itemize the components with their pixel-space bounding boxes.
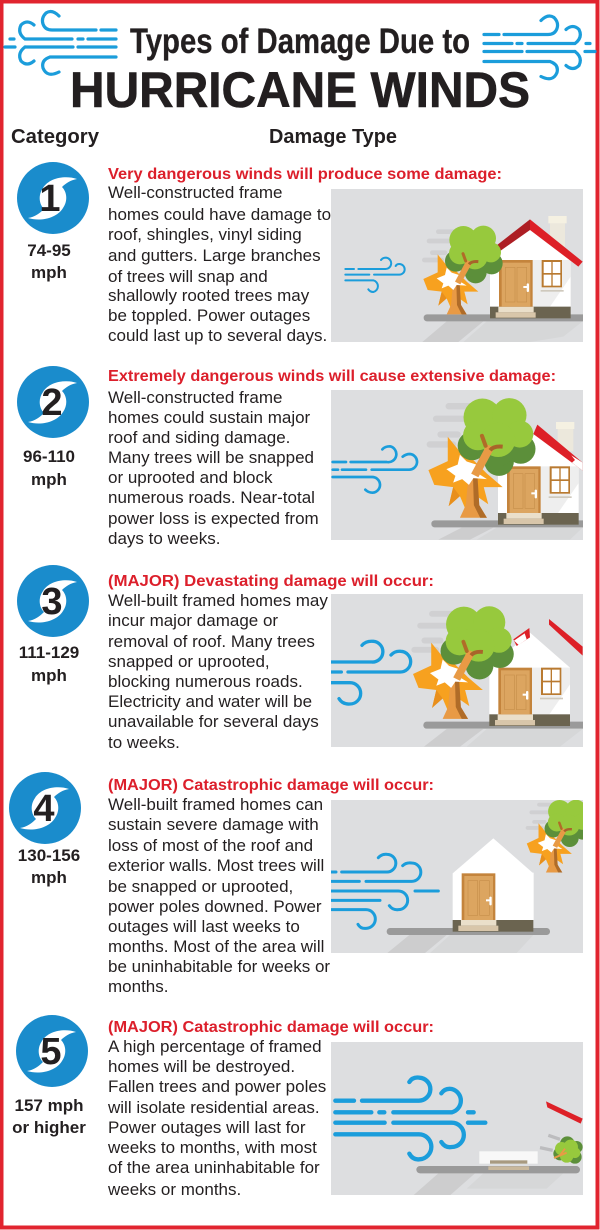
category 3 description: removal of roof. Many trees	[108, 632, 315, 651]
fallen tree	[428, 398, 536, 518]
category 1 badge: 74-95	[27, 241, 71, 260]
category 1 description: could last up to several days.	[108, 326, 327, 345]
column heading: category: Category	[11, 126, 100, 148]
category 4 badge: 4	[33, 788, 55, 830]
category 5 description: weeks to months, with most	[107, 1138, 317, 1157]
category 3 badge: 111-129	[19, 643, 79, 662]
category 4 description: months. Most of the area will	[108, 937, 324, 956]
category 5 description: Fallen trees and power poles	[108, 1077, 326, 1096]
wind gust	[333, 446, 417, 493]
category 3 description	[108, 573, 434, 752]
category 2 description: homes could sustain major	[108, 408, 311, 427]
title: Types of Damage Due to	[130, 22, 470, 61]
wind gust	[345, 258, 405, 292]
panel: category 2 illustration	[330, 385, 600, 545]
title	[70, 22, 530, 118]
category 4 description: be snapped or uprooted,	[108, 877, 293, 896]
category 5 badge: 5	[40, 1031, 62, 1073]
category 4 badge	[9, 772, 81, 887]
category 4 description: outages will last weeks to	[108, 917, 300, 936]
panel: category 4 illustration	[330, 795, 592, 955]
house	[489, 633, 570, 726]
panel: category 3 illustration	[330, 590, 597, 750]
category 2 description: Many trees will be snapped	[108, 448, 314, 467]
broken roof pieces	[513, 619, 583, 656]
category 1 badge: 1	[39, 178, 61, 220]
category 5 description: weeks or months.	[107, 1180, 241, 1199]
category 5 description: Power outages will last for	[108, 1118, 306, 1137]
category 2 description: power loss is expected from	[108, 509, 319, 528]
category 4 description: months.	[108, 977, 168, 996]
category 4 description: loss of most of the roof and	[108, 836, 313, 855]
category 1 description: homes could have damage to	[108, 205, 331, 224]
house	[498, 431, 579, 525]
wind gust	[331, 854, 438, 928]
category 3 description: Well-built framed homes may	[108, 591, 328, 610]
house	[490, 225, 571, 318]
category 4 description: (MAJOR) Catastrophic damage will occur:	[108, 777, 434, 794]
category 2 description: days to weeks.	[108, 529, 220, 548]
red roof	[497, 219, 583, 267]
category 3 description: blocking numerous roads.	[108, 672, 303, 691]
icon: right header wind gust	[484, 16, 595, 79]
destroyed house floor	[479, 1151, 538, 1170]
category 3 description: incur major damage or	[108, 611, 278, 630]
category 2 badge: 96-110	[23, 447, 75, 466]
category 3 badge	[17, 565, 89, 685]
category 2 description	[108, 368, 556, 548]
category 1 description: of trees will snap and	[108, 267, 268, 286]
wind gust	[331, 641, 411, 704]
category 3 description: snapped or uprooted,	[108, 652, 270, 671]
category 2 badge: 2	[41, 382, 63, 424]
category 5 description: (MAJOR) Catastrophic damage will occur:	[108, 1019, 434, 1036]
flying roof piece	[546, 1101, 583, 1124]
category 2 description: numerous roads. Near-total	[108, 488, 315, 507]
fallen tree	[413, 606, 514, 719]
column heading: damage type: Damage Type	[269, 126, 397, 148]
category 4 description: sustain severe damage with	[108, 815, 319, 834]
category 1 description: be toppled. Power outages	[108, 306, 310, 325]
category 5 badge: or higher	[12, 1118, 86, 1137]
small fallen tree	[540, 1135, 583, 1164]
category 2 description: roof and siding damage.	[108, 428, 290, 447]
category 1 description: roof, shingles, vinyl siding	[108, 225, 302, 244]
house without roof or window	[453, 838, 534, 932]
category 1 description	[108, 166, 502, 345]
panel: category 5 illustration	[330, 1035, 583, 1199]
category 5 description	[107, 1019, 434, 1199]
category 1 badge	[17, 162, 89, 282]
category 1 description: Well-constructed frame	[108, 183, 282, 202]
category 4 description	[108, 777, 434, 996]
category 5 description: homes will be destroyed.	[108, 1057, 295, 1076]
category 3 badge: 3	[41, 581, 63, 623]
icon: left header wind gust	[5, 12, 116, 74]
category 1 badge: mph	[31, 263, 67, 282]
wind gust	[335, 1078, 485, 1159]
chimney	[548, 216, 567, 247]
category 2 badge: mph	[31, 470, 67, 489]
category 4 badge: mph	[31, 868, 67, 887]
category 4 badge: 130-156	[18, 846, 80, 865]
category 1 description: Very dangerous winds will produce some damage:	[108, 166, 502, 183]
category 4 description: exterior walls. Most trees will	[108, 856, 324, 875]
title: HURRICANE WINDS	[70, 62, 530, 118]
category 5 description: A high percentage of framed	[108, 1037, 322, 1056]
category 1 description: shallowly rooted trees may	[108, 286, 310, 305]
category 5 badge: 157 mph	[15, 1096, 83, 1115]
tree in distance	[527, 800, 592, 872]
category 3 badge: mph	[31, 666, 67, 685]
category 1 description: and gutters. Large branches	[108, 246, 321, 265]
damaged red roof	[533, 425, 583, 471]
fallen tree	[423, 226, 503, 314]
category 5 description: will isolate residential areas.	[107, 1098, 320, 1117]
category 3 description: Electricity and water will be	[108, 692, 312, 711]
category 4 description: be uninhabitable for weeks or	[108, 957, 330, 976]
category 2 description: or uprooted and block	[108, 468, 273, 487]
category 5 badge	[12, 1015, 88, 1137]
category 2 description: Well-constructed frame	[108, 388, 282, 407]
category 5 description: of the area uninhabitable for	[108, 1158, 320, 1177]
category 2 description: Extremely dangerous winds will cause extensive damage:	[108, 368, 556, 385]
category 4 description: Well-built framed homes can	[108, 795, 323, 814]
chimney	[556, 422, 574, 451]
category 4 description: power poles downed. Power	[108, 897, 322, 916]
panel: category 1 illustration	[330, 180, 597, 350]
category 2 badge	[17, 366, 89, 489]
category 3 description: (MAJOR) Devastating damage will occur:	[108, 573, 434, 590]
category 3 description: unavailable for several days	[108, 712, 319, 731]
category 3 description: to weeks.	[108, 733, 180, 752]
